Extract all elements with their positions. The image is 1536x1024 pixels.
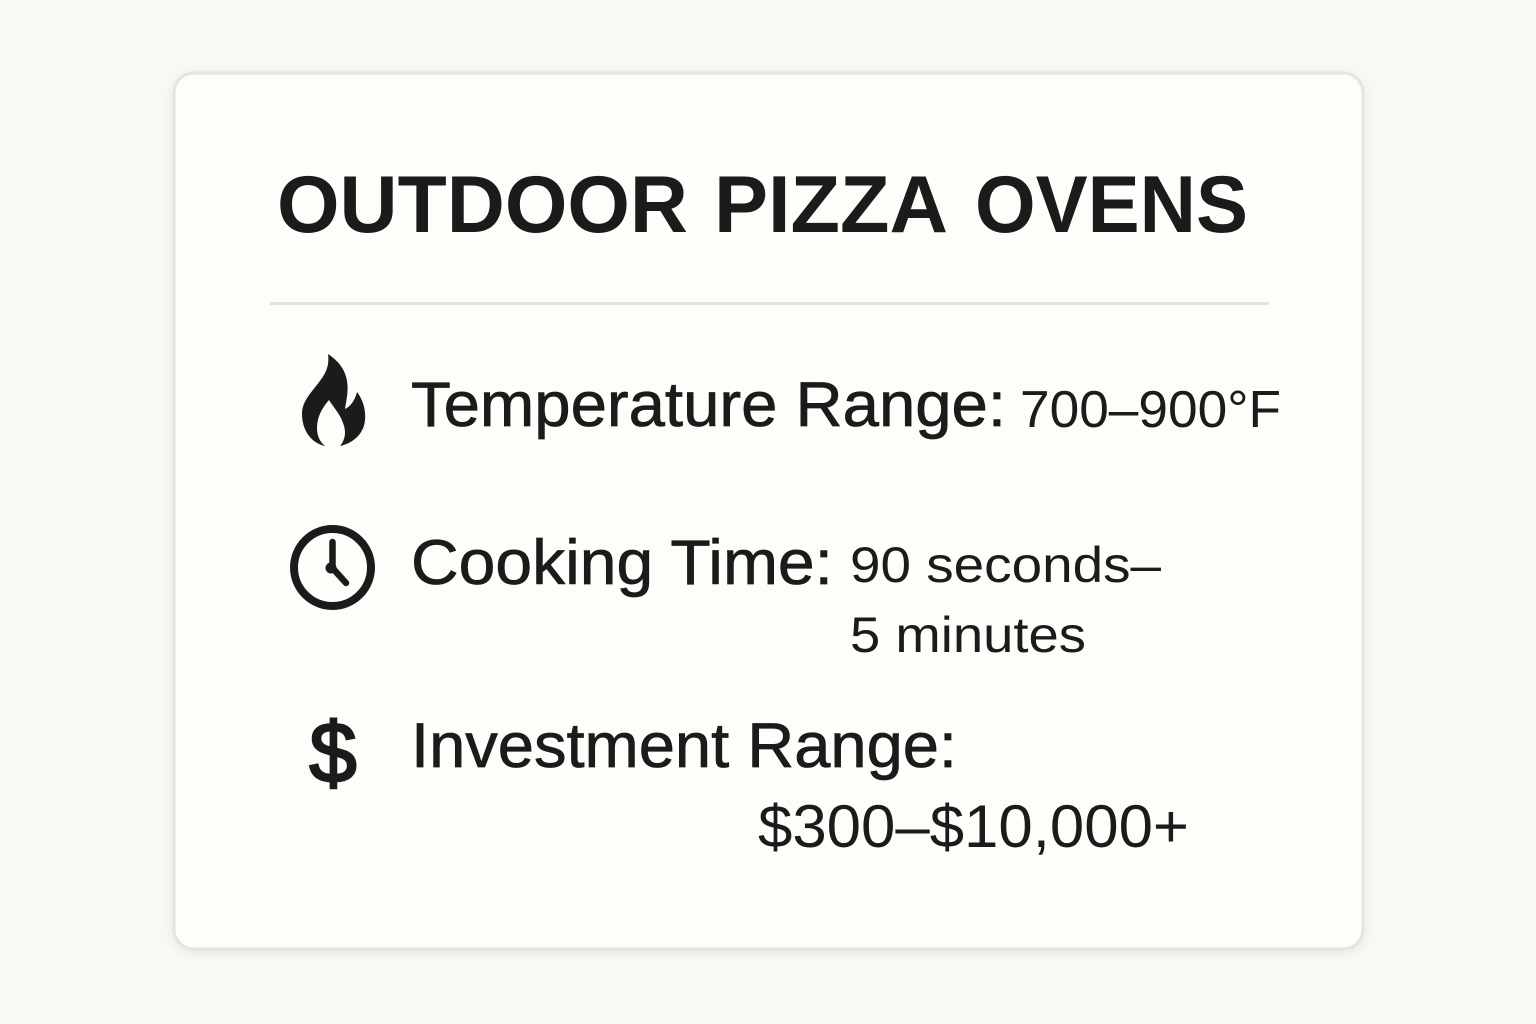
icon: clock (294, 529, 371, 606)
label: cooking time: Cooking Time: (411, 528, 833, 598)
value: temperature range: 700–900°F (1020, 381, 1281, 439)
label: investment range: Investment Range: (411, 711, 957, 781)
value: cooking time: 90 seconds– (850, 537, 1161, 593)
value: cooking time (850, 537, 1161, 663)
label: temperature range: Temperature Range: (411, 370, 1006, 440)
panel: outdoor pizza ovens card (174, 73, 1363, 949)
icon: dollar sign: $ (309, 706, 357, 801)
title: PIZZA (714, 160, 948, 250)
value: cooking time: 5 minutes (850, 607, 1086, 663)
title: OVENS (975, 160, 1248, 250)
icon: flame (302, 354, 365, 446)
title: OUTDOOR (277, 160, 688, 250)
value: investment range: $300–$10,000+ (758, 793, 1189, 860)
title (277, 160, 1248, 250)
